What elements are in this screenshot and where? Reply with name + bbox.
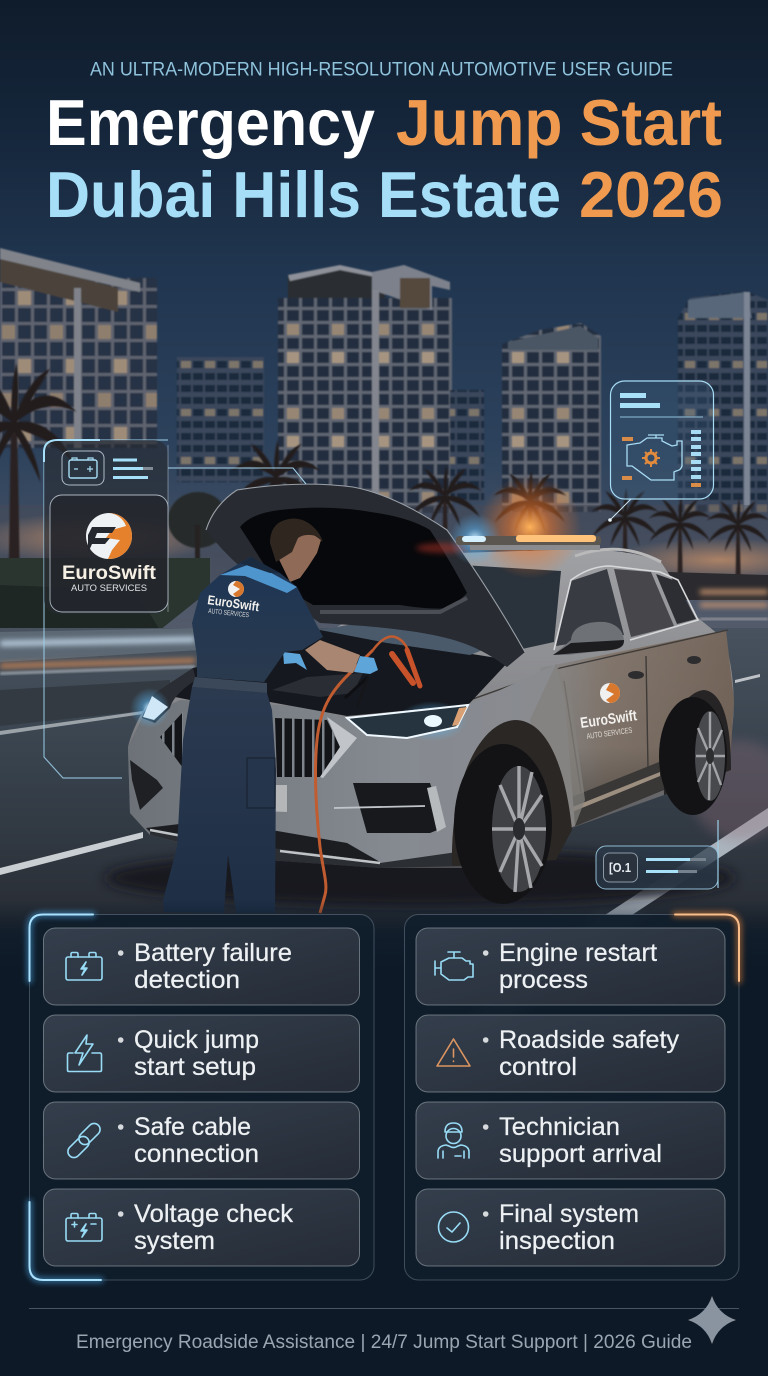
logo tagline: AUTO SERVICES: [71, 583, 147, 594]
back logo: AUTO SERVICES: [208, 608, 250, 619]
item: final system inspection: Final system: [499, 1200, 639, 1228]
title: Emergency: [46, 86, 375, 159]
city skyline: [0, 248, 768, 513]
item: engine restart process: [416, 928, 725, 1005]
logo card: [50, 495, 168, 612]
lower dark background: [0, 900, 768, 1376]
readout value: [O.1: [609, 860, 631, 875]
eyebrow heading: AN ULTRA-MODERN HIGH-RESOLUTION AUTOMOTIVE USER GUIDE: [90, 60, 673, 80]
engine outline: [627, 435, 682, 480]
logo wordmark: EuroSwift: [62, 563, 157, 584]
title: [46, 86, 723, 231]
sill: [564, 760, 664, 830]
item: engine restart process: Engine restart: [499, 939, 657, 967]
building: right centre tower: [502, 323, 601, 512]
road surface: [0, 628, 768, 968]
wheel arches: [452, 690, 731, 866]
building: small blue tower: [177, 357, 264, 482]
door lines and handles: [470, 630, 728, 792]
icon: technician: [438, 1123, 469, 1158]
item: quick jump start setup: [44, 1015, 360, 1092]
building: left tower: [0, 248, 157, 448]
rear wheel: [659, 697, 727, 815]
panel blue glow corners: [30, 914, 101, 1280]
door panels: [540, 630, 734, 825]
cargo pocket: [247, 758, 275, 808]
front fascia and fender: [128, 664, 575, 866]
roadside hedge and guard wall: [0, 558, 768, 637]
item: roadside safety control: Roadside safety: [499, 1026, 679, 1054]
icon: battery: [66, 952, 102, 980]
icon: warning triangle: [437, 1039, 470, 1066]
item: roadside safety control: [416, 1015, 725, 1092]
item: quick jump start setup: Quick jump: [134, 1026, 259, 1054]
connector line: [168, 468, 306, 484]
item: safe cable connection: [44, 1102, 360, 1179]
technician: [163, 518, 378, 913]
background: night sky: [0, 0, 768, 640]
horizon dusk glow: [0, 505, 768, 590]
item: technician support arrival: [416, 1102, 725, 1179]
building: central tower: [278, 265, 452, 513]
text bars: [620, 393, 703, 418]
item: final system inspection: [416, 1189, 725, 1266]
item: battery failure detection: [44, 928, 360, 1005]
item: voltage check system: Voltage check: [134, 1200, 294, 1228]
item: quick jump start setup: start setup: [134, 1053, 256, 1081]
status bars: [113, 458, 153, 479]
item: technician support arrival: Technician: [499, 1113, 620, 1141]
item: voltage check system: system: [134, 1227, 215, 1255]
icon: engine: [435, 952, 473, 980]
palm trees: [0, 363, 768, 596]
license plate: [238, 785, 287, 812]
back logo: EuroSwift: [207, 592, 261, 614]
item: technician support arrival: support arrival: [499, 1140, 662, 1168]
panel: left checklist: [30, 914, 374, 1280]
windshield: [462, 565, 561, 649]
collar: [240, 557, 280, 573]
gear: [642, 449, 660, 467]
icon: voltage battery: [66, 1214, 102, 1241]
footer divider: [29, 1308, 739, 1309]
left headlight: [130, 688, 170, 728]
engine bay: [155, 630, 510, 716]
item: battery failure detection: detection: [134, 966, 240, 994]
bonnet lip: [142, 668, 196, 723]
coverall trousers: [163, 687, 276, 913]
lower bumper: [150, 830, 466, 868]
lower intakes: [130, 760, 446, 833]
panel: right checklist: [404, 914, 739, 1280]
item: battery failure detection: Battery failure: [134, 939, 292, 967]
icon: sparkle star: [688, 1296, 736, 1344]
item: engine restart process: process: [499, 966, 588, 994]
door logo: AUTO SERVICES: [586, 726, 633, 741]
title: 2026: [579, 158, 723, 231]
back logo: [207, 581, 261, 619]
callout: voltage readout: [596, 820, 718, 889]
item: voltage check system: [44, 1189, 360, 1266]
side gauge: [622, 430, 701, 487]
icon: cable link: [65, 1121, 103, 1160]
icon: charging bolt: [68, 1035, 102, 1072]
open hood: [206, 484, 525, 667]
road markings: [0, 674, 768, 915]
item: roadside safety control: control: [499, 1053, 577, 1081]
shirt blue yoke: [220, 563, 297, 593]
building: narrow tower: [450, 390, 484, 502]
footer text: Emergency Roadside Assistance | 24/7 Jump Start Support | 2026 Guide: [76, 1332, 692, 1353]
roof rail: [575, 549, 661, 562]
side windows: [554, 566, 698, 650]
arm and right glove: [305, 640, 378, 674]
callout: engine diagnostics: [608, 381, 714, 522]
icon: check circle: [438, 1212, 468, 1242]
door logo: [579, 683, 638, 741]
title: Jump Start: [396, 86, 722, 159]
ground shadow: [105, 850, 735, 906]
EuroSwift logo mark: [86, 513, 132, 559]
callout tail: [610, 499, 631, 520]
car body: [128, 549, 734, 868]
battery icon box: [62, 451, 104, 485]
fender to door shading: [530, 664, 585, 832]
readout bars: [646, 858, 706, 873]
right headlight: [347, 701, 468, 741]
road light trails: [0, 590, 768, 675]
item: final system inspection: inspection: [499, 1227, 615, 1255]
title: Dubai Hills Estate: [46, 158, 561, 231]
building: far right tower: [678, 291, 768, 512]
door logo: EuroSwift: [579, 707, 638, 732]
panel orange glow corner: [675, 914, 739, 981]
left glove: [283, 652, 307, 670]
item: safe cable connection: Safe cable: [134, 1113, 251, 1141]
front wheel: [454, 744, 552, 904]
callout: battery and logo card: [44, 440, 306, 778]
service SUV: [105, 475, 735, 913]
head: [270, 518, 323, 582]
item: safe cable connection: connection: [134, 1140, 259, 1168]
emergency light bar: [416, 475, 601, 579]
jump leads and clamps: [316, 637, 420, 913]
grilles: [160, 712, 357, 778]
work shirt: [192, 557, 323, 682]
door lower shading: [540, 630, 734, 825]
side mirror: [553, 622, 624, 655]
